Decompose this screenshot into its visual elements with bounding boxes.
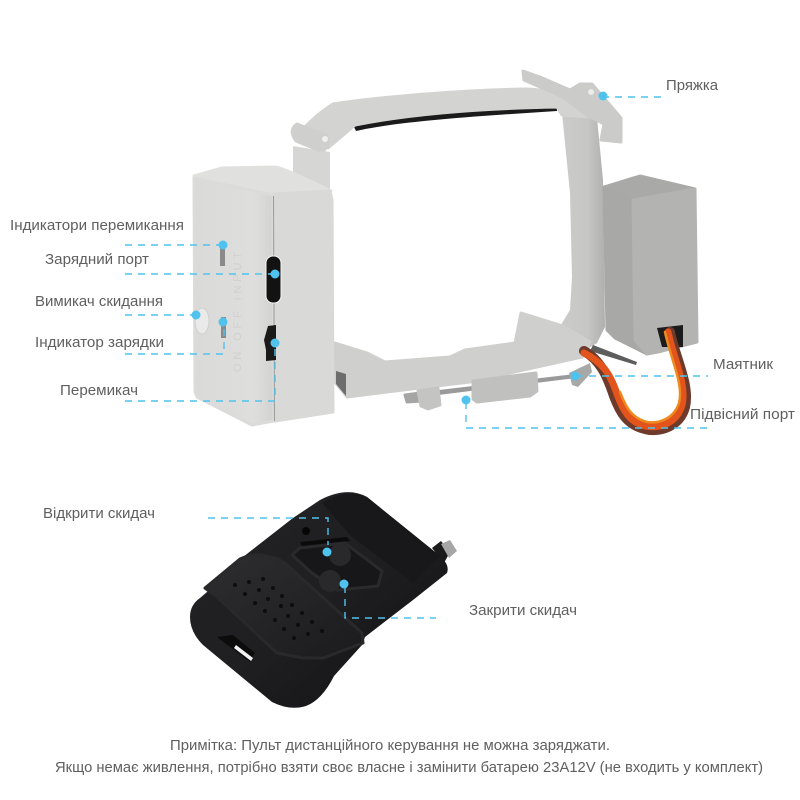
seam <box>274 196 275 421</box>
label: release switch: Вимикач скидання <box>35 294 163 310</box>
label: switch: Перемикач <box>60 383 138 399</box>
servo cable <box>584 332 686 430</box>
charging port <box>266 256 281 303</box>
open button <box>329 544 351 566</box>
button panel <box>292 543 382 590</box>
right vertical frame <box>555 113 605 352</box>
note: first line: Примітка: Пульт дистанційного керування не можна заряджати. <box>170 738 610 754</box>
label: charge indicator: Індикатор зарядки <box>35 335 164 351</box>
label: open dropper: Відкрити скидач <box>43 506 155 522</box>
right face <box>274 191 333 421</box>
buckle <box>523 71 621 142</box>
button slit <box>300 537 350 546</box>
slide switch <box>264 325 276 361</box>
lower arm shading <box>336 371 346 396</box>
printed markings: ON OFF INPUT <box>232 252 244 372</box>
speaker holes <box>233 577 324 640</box>
pendulum <box>569 345 637 387</box>
label: suspension port: Підвісний порт <box>690 407 795 423</box>
note: second line: Якщо немає живлення, потрібно взяти своє власне і замінити батарею 23A12V (не входить у комплект) <box>55 760 763 776</box>
lower frame arm <box>335 313 590 397</box>
top band <box>322 494 440 583</box>
antenna <box>432 540 457 563</box>
label: charging port: Зарядний порт <box>45 252 149 268</box>
key ring recess <box>217 635 255 662</box>
release button <box>195 308 209 334</box>
black strap <box>353 105 557 131</box>
callout dots <box>192 92 608 588</box>
remote body <box>190 492 448 708</box>
label: close dropper: Закрити скидач <box>469 603 577 619</box>
release rod <box>405 373 576 409</box>
label: switching indicators: Індикатори перемикання <box>10 218 184 234</box>
device: drop mechanism <box>194 71 697 430</box>
left face <box>194 178 274 425</box>
switching indicator <box>220 246 225 266</box>
hinge <box>292 124 330 192</box>
sliding cover <box>205 555 363 658</box>
remote control <box>190 492 457 708</box>
led hole <box>302 527 310 535</box>
charge indicator <box>221 317 226 338</box>
control box <box>194 167 333 425</box>
close button <box>319 570 341 592</box>
key ring slot <box>234 645 253 661</box>
upper frame arm <box>304 89 590 148</box>
label: pendulum: Маятник <box>713 357 774 373</box>
label: buckle: Пряжка <box>666 78 719 94</box>
top face <box>194 167 331 196</box>
grey servo box <box>604 176 697 354</box>
leader lines <box>125 97 708 618</box>
